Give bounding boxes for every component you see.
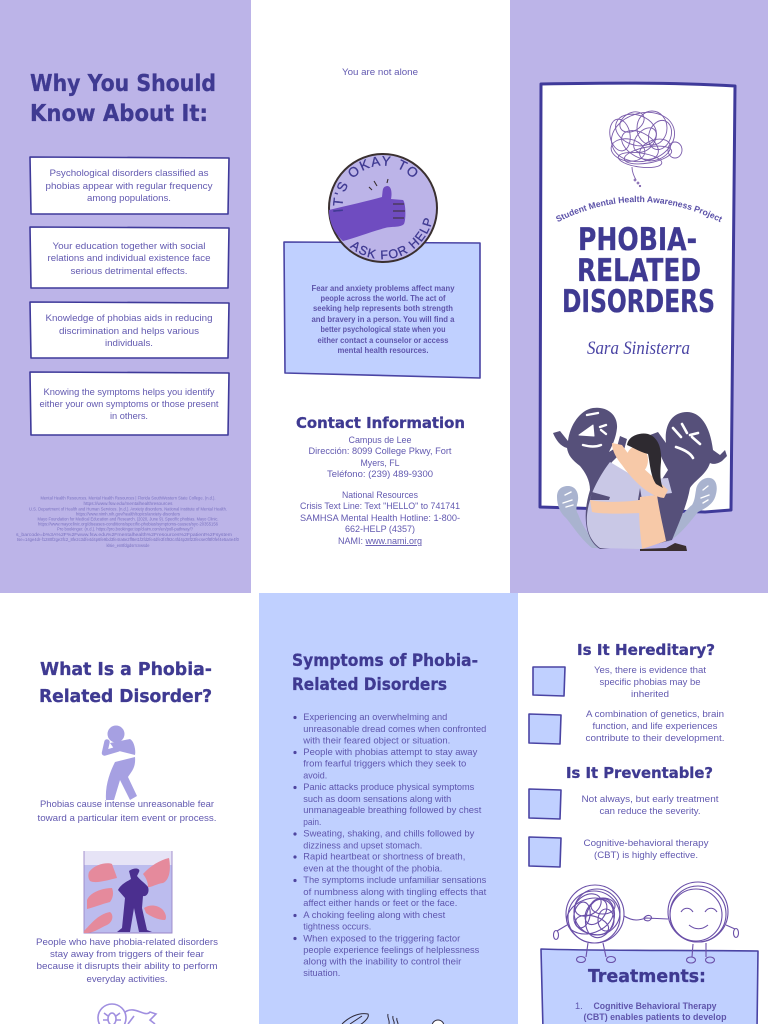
contact details: Crisis Text Line: Text "HELLO" to 741741 — [300, 500, 460, 511]
text box: identify symptoms: in others. — [110, 410, 148, 421]
contact details — [300, 434, 460, 546]
bulleted list: symptoms: unreasonable dread comes when confronted — [303, 724, 486, 734]
text box: identify symptoms — [30, 372, 229, 435]
heading: what is a phobia-related disorder: Related Disorder? — [39, 686, 212, 707]
text box: regular frequency: phobias appear with regular frequency — [46, 180, 213, 191]
badge: it's okay to ask for help — [328, 153, 438, 263]
bulleted list: symptoms: unmanageable breathing followed by chest — [303, 805, 482, 815]
checkbox and text: genetics: A combination of genetics, brain — [586, 708, 724, 719]
contact details: National Resources — [342, 489, 418, 500]
references: Mayo Foundation for Medical Education and Research. (2020, June 9). Specific phobias. Mayo Clinic. — [38, 516, 218, 522]
bulleted list: symptoms: Rapid heartbeat or shortness of breath, — [303, 852, 465, 862]
contact details: 662-HELP (4357) — [345, 523, 415, 534]
bulleted list: symptoms: such as doom sensations along with — [303, 794, 451, 804]
checkbox and text: cbt — [529, 837, 709, 867]
text: people avoid triggers: because it disrupts their ability to perform — [36, 960, 218, 971]
text box: detrimental effects: Your education together with social — [52, 240, 206, 251]
bulleted list: symptoms: with their feared object or situation. — [302, 736, 450, 746]
references: https://www.fsw.edu/mentalhealthresources — [84, 501, 172, 506]
text: phobias cause fear: toward a particular item event or process. — [38, 812, 216, 823]
heading: why you should know about it — [30, 71, 216, 127]
text box: reducing discrimination: Knowledge of phobias aids in reducing — [46, 312, 212, 323]
text box: identify symptoms: either your own symptoms or those present — [40, 398, 219, 409]
title: phobia-related disorders: DISORDERS — [562, 284, 715, 320]
checkbox and text: early treatment: Not always, but early treatment — [582, 793, 719, 804]
caption: you are not alone: You are not alone — [342, 66, 418, 77]
text box: detrimental effects: relations and individual existence face — [48, 252, 211, 263]
icon: spider in circle with cloud — [98, 1004, 156, 1024]
small ghost left — [557, 486, 602, 548]
text: people avoid triggers: everyday activities. — [86, 973, 168, 984]
heading: symptoms of phobia-related disorders — [292, 651, 478, 695]
panel: symptoms — [259, 593, 518, 1024]
curved subtitle: Student Mental Health Awareness Project — [556, 196, 722, 222]
references: U.S. Department of Health and Human Services. (n.d.). Anxiety disorders. National Institute of Mental Health. — [29, 506, 227, 512]
bulleted list: symptoms: even at the thought of the phobia. — [303, 864, 442, 874]
illustration: tangled and calm characters shaking hands — [554, 882, 738, 963]
bulleted list: symptoms: avoid. — [303, 770, 327, 780]
panel: hereditary, preventable, treatments — [518, 593, 768, 1024]
text box: reducing discrimination: individuals. — [105, 337, 153, 348]
bulleted list: symptoms — [293, 712, 487, 978]
references: s_barcode=b%3A%2F%2Fwww.fsw.edu%2Fmentalhealth%2Fresources%2Fpatient%2Fsystem — [16, 532, 233, 537]
heading: why you should know about it: Why You Should — [30, 71, 216, 97]
heading: what is a phobia-related disorder: What Is a Phobia- — [40, 659, 212, 680]
bulleted list: symptoms: from fearful triggers which they seek to — [303, 758, 466, 768]
icon: trembling person — [104, 726, 137, 800]
illustration: silhouette with reaching hands — [84, 851, 172, 933]
small ghost right — [664, 478, 717, 542]
references: Pro bookinger. (n.d.). https://pro.bookinger.top/claim.com/en/poll-pathway/? — [57, 526, 194, 532]
bulleted list: symptoms: along with the inability to control their — [303, 956, 461, 966]
checkbox and text: genetics: contribute to their development. — [586, 732, 724, 743]
references: tse=14ge4dr-f1280f2ge3fc2_8fe2c3dfe4d4p6fe9bd3fe4ra6e2ff8et1f2fd2fe4dfe3f4f92c4fd4p28f23fecse0f8f0fef4e5a4e4f0 — [17, 537, 240, 542]
checkbox and text: cbt: (CBT) is highly effective. — [594, 849, 698, 860]
callout box: seek help: either contact a counselor or access — [318, 336, 449, 345]
checkbox and text: early treatment — [529, 789, 719, 819]
text box: detrimental effects: serious detrimental effects. — [70, 265, 188, 276]
icon: tangled thought scribble — [606, 106, 682, 187]
box: treatments — [541, 949, 758, 1024]
bulleted list: symptoms: A choking feeling along with chest — [303, 910, 446, 920]
callout box: seek help: and bravery in a person. You will find a — [312, 315, 455, 324]
heading: why you should know about it: Know About It: — [30, 101, 208, 127]
shadow monster right — [640, 412, 727, 548]
heading: symptoms of phobia-related disorders: Symptoms of Phobia- — [292, 651, 478, 671]
callout box: seek help — [284, 242, 480, 378]
contact details: Campus de Lee — [348, 434, 412, 445]
heading: symptoms of phobia-related disorders: Related Disorders — [292, 675, 447, 695]
panel: why you should know about it — [0, 0, 251, 593]
heading: is it preventable: Is It Preventable? — [566, 764, 713, 782]
panel: you are not alone and contact — [283, 66, 481, 546]
numbered treatment text: 1. — [575, 1001, 583, 1011]
bulleted list: symptoms: Panic attacks produce physical symptoms — [303, 782, 475, 792]
checkbox and text: genetics — [529, 708, 724, 744]
panel: cover — [510, 0, 768, 593]
heading: is it hereditary: Is It Hereditary? — [577, 641, 715, 659]
bulleted list: symptoms: When exposed to the triggering factor — [303, 934, 460, 944]
text: phobias cause fear: Phobias cause intense unreasonable fear — [40, 798, 214, 809]
callout box: seek help: better psychological state when you — [320, 325, 446, 334]
cover frame — [540, 83, 735, 512]
panel: what is a phobia-related disorder — [0, 593, 259, 1024]
bulleted list: symptoms: situation. — [303, 968, 340, 978]
badge: it's okay to ask for help: ASK FOR HELP — [350, 218, 432, 260]
icon: thumbs up arm — [329, 186, 405, 241]
contact details: SAMHSA Mental Health Hotline: 1-800- — [300, 512, 460, 523]
girl shoe — [640, 543, 687, 551]
references: https://www.nimh.nih.gov/health/topics/anxiety-disorders — [76, 512, 180, 516]
checkbox and text: early treatment: can reduce the severity. — [600, 805, 700, 816]
bulleted list: symptoms: The symptoms include unfamiliar sensations — [303, 875, 487, 885]
bulleted list: symptoms: dizziness and upset stomach. — [303, 840, 422, 850]
numbered treatment text — [575, 1001, 727, 1022]
callout box: seek help: people across the world. The act of — [320, 294, 446, 303]
heading: what is a phobia-related disorder — [39, 659, 212, 707]
callout box: seek help: seeking help represents both strength — [313, 304, 453, 313]
bulleted list: symptoms: Experiencing an overwhelming and — [303, 712, 447, 722]
checkbox and text: evidence — [533, 664, 706, 699]
checkbox and text: genetics: function, and life experiences — [592, 720, 718, 731]
text box: regular frequency: among populations. — [87, 192, 171, 203]
references: klsie_en8fdgdsrrcnwsde — [106, 543, 150, 548]
text box: identify symptoms: Knowing the symptoms helps you identify — [44, 386, 215, 397]
text: people avoid triggers: stay away from triggers of their fear — [50, 948, 204, 959]
illustration: frightened girl with shadows — [553, 408, 727, 551]
bulleted list: symptoms: People with phobias attempt to stay away — [303, 747, 478, 757]
ghost faces — [579, 425, 594, 436]
title: phobia-related disorders — [562, 222, 715, 320]
references — [16, 496, 240, 548]
bulleted list: symptoms: pain. — [303, 817, 321, 827]
badge: it's okay to ask for help: IT'S OKAY TO — [332, 156, 418, 212]
numbered treatment text: Cognitive Behavioral Therapy — [594, 1001, 717, 1011]
text box: regular frequency: Psychological disorders classified as — [50, 167, 209, 178]
numbered treatment text: (CBT) enables patients to develop — [584, 1012, 727, 1022]
contact details: NAMI: www.nami.org — [338, 535, 422, 546]
bulleted list: symptoms: Sweating, shaking, and chills followed by — [303, 828, 475, 838]
references: https://www.mayoclinic.org/diseases-conditions/specific-phobias/symptoms-causes/syc-20355156 — [38, 522, 219, 526]
text: people avoid triggers: People who have phobia-related disorders — [36, 936, 218, 947]
shadow monster left — [553, 408, 627, 549]
text: phobias cause fear — [38, 798, 216, 823]
checkbox and text: evidence: Yes, there is evidence that — [594, 664, 706, 675]
contact details: Teléfono: (239) 489-9300 — [327, 468, 433, 479]
checkbox and text: cbt: Cognitive-behavioral therapy — [584, 837, 709, 848]
text box: detrimental effects — [30, 227, 229, 288]
title: phobia-related disorders: PHOBIA- — [578, 222, 697, 258]
callout box: seek help: mental health resources. — [338, 346, 428, 355]
callout box: seek help: Fear and anxiety problems affect many — [312, 284, 455, 293]
author name: Sara Sinisterra — [587, 338, 690, 359]
text box: reducing discrimination — [30, 302, 229, 358]
girl dress — [587, 462, 672, 549]
bulleted list: symptoms: of numbness along with tingling effects that — [303, 887, 487, 897]
heading: contact information: Contact Information — [296, 414, 465, 432]
title: phobia-related disorders: RELATED — [577, 253, 701, 289]
bulleted list: symptoms: tightness occurs. — [303, 922, 371, 932]
contact details: Dirección: 8099 College Pkwy, Fort — [308, 445, 452, 456]
text box: regular frequency — [30, 157, 229, 214]
references: Mental Health Resources. Mental Health Resources | Florida SouthWestern State College. (n.d.). — [40, 496, 216, 500]
checkbox and text: evidence: inherited — [631, 688, 669, 699]
text: people avoid triggers — [36, 936, 218, 984]
bulleted list: symptoms: people experience feelings of helplessness — [303, 945, 480, 955]
bulleted list: symptoms: affect either hands or feet or the face. — [303, 898, 457, 908]
girl legs and arms — [639, 495, 666, 549]
girl face and hair — [626, 446, 648, 474]
checkbox and text: evidence: specific phobias may be — [600, 676, 700, 687]
contact details: Myers, FL — [360, 457, 400, 468]
text box: reducing discrimination: discrimination and helps various — [59, 325, 199, 336]
icon: partial sketch at page edge — [342, 1014, 444, 1024]
heading: treatments: Treatments: — [588, 966, 706, 987]
